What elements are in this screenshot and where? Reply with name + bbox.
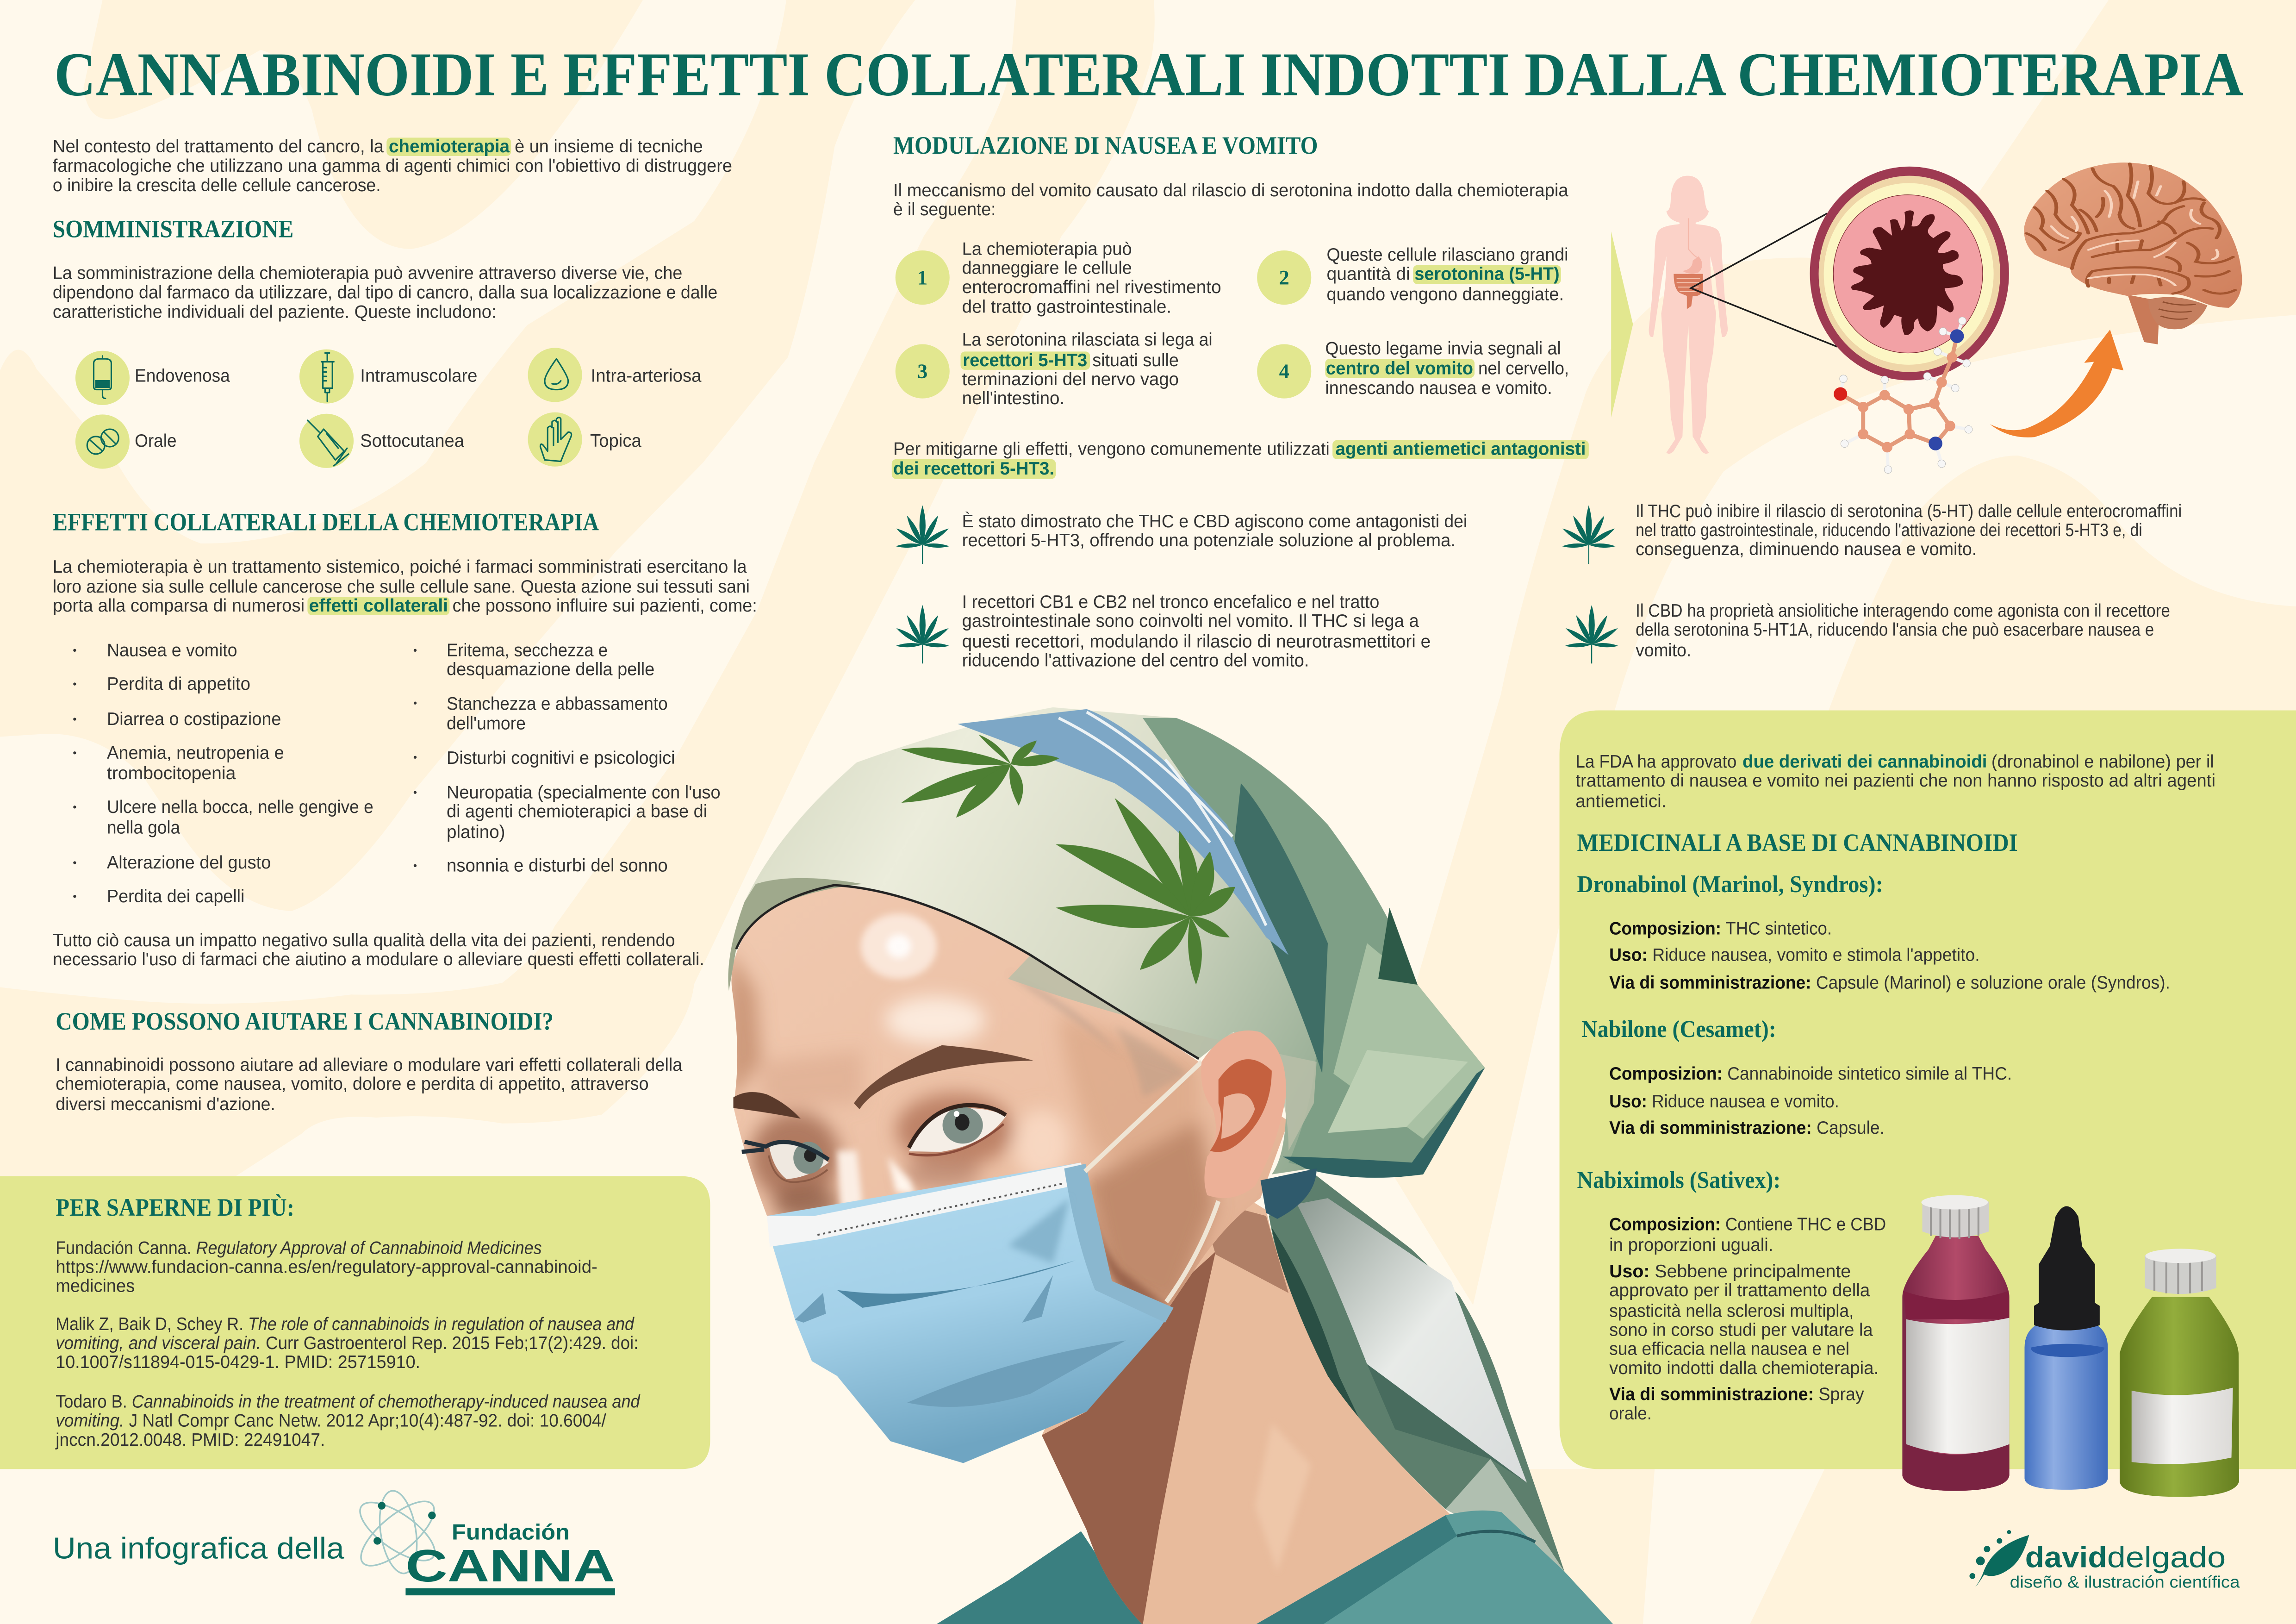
icon: cannabis leaf [1562,506,1616,564]
red bottle [1902,1195,2010,1491]
list: side effects column 1: Anemia, neutropenia e [107,743,284,763]
text block: somministrazione: dipendono dal farmaco da utilizzare, dal tipo di cancro, dalla sua localizzazione e dalle [53,282,717,302]
label: sottocutanea: Sottocutanea [360,431,464,451]
text: CBD ansiolitiche [1636,601,2170,660]
text block: impact [53,931,704,969]
text block: effetti collaterali [53,557,757,616]
text: THC CBD antagonisti: È stato dimostrato che THC e CBD agiscono come antagonisti dei [962,512,1467,531]
text block: come possono aiutare: I cannabinoidi possono aiutare ad alleviare o modulare vari effetti collaterali della [56,1055,683,1075]
text: THC inibire: Il THC può inibire il rilascio di serotonina (5-HT) dalle cellule enterocromaffini [1636,501,2182,521]
text: CBD ansiolitiche: vomito. [1636,640,1691,660]
arrow: triangle [1611,231,1633,418]
face mask [767,1162,1174,1463]
right scrub [1255,1511,1614,1624]
scarf [728,707,1485,1178]
logo: fundación canna: CANNA [405,1540,615,1591]
text: THC inibire [1636,501,2182,559]
icon: cannabis leaf [1564,605,1619,663]
medicine: nabilone: Via di somministrazione: Capsule. [1609,1118,1885,1138]
text: recettori CB1 CB2: questi recettori, modulando il rilascio di neurotrasmettitori e [962,631,1431,651]
text block: intro: o inibire la crescita delle cellule cancerose. [53,175,381,195]
step 4: 4 [1279,360,1289,382]
step 3: situati sulle [1092,350,1179,370]
text block: effetti collaterali: effetti collaterali [309,596,448,616]
text block: come possono aiutare [56,1055,683,1114]
text block: antiemetici: agenti antiemetici antagonisti [1335,439,1586,459]
medicine: nabiximols: sua efficacia nella nausea e nel [1609,1339,1849,1359]
medicine: dronabinol [1577,871,2170,993]
label: orale: Orale [135,431,177,451]
heading: somministrazione: SOMMINISTRAZIONE [53,215,293,243]
medicine: nabiximols: Uso: Sebbene principalmente [1609,1262,1851,1281]
step 1 [896,239,1221,317]
medicine: nabiximols: Nabiximols (Sativex): [1577,1167,1780,1193]
medicine: nabiximols: sono in corso studi per valutare la [1609,1320,1873,1340]
text: FDA [1575,752,2215,811]
step 3: La serotonina rilasciata si lega ai [962,330,1213,350]
heading: modulazione: MODULAZIONE DI NAUSEA E VOMITO [893,131,1318,159]
scarf tail [1269,1171,1564,1572]
text block: somministrazione: caratteristiche individuali del paziente. Queste includono: [53,302,497,322]
medicine: nabilone [1581,1016,2012,1138]
step 4: centro del vomito [1326,358,1473,378]
logo: fundación canna [351,1488,615,1595]
icon: endovenosa [75,351,130,405]
icon: intramuscolare [299,350,354,404]
heading: references: PER SAPERNE DI PIÙ: [56,1193,294,1221]
text: FDA: La FDA ha approvato [1575,752,1736,772]
label: endovenosa: Endovenosa [135,366,230,386]
list: side effects column 1: nella gola [107,818,180,837]
step 4 [1257,339,1569,399]
step 2: 2 [1279,266,1289,289]
step 3: terminazioni del nervo vago [962,369,1179,389]
step 1: danneggiare le cellule [962,258,1132,278]
panel: per saperne di più [0,1176,710,1469]
logo: david delgado: delgado [2107,1541,2226,1574]
medicine: nabiximols: Composizion: Contiene THC e CBD [1609,1215,1886,1235]
list: side effects column 2: desquamazione della pelle [447,660,654,680]
scarf leaves [901,735,1235,985]
heading: effetti collaterali: EFFETTI COLLATERALI DELLA CHEMIOTERAPIA [53,508,599,536]
step 2: Queste cellule rilasciano grandi [1326,245,1568,265]
list: side effects column 1: Alterazione del gusto [107,853,271,873]
medicine: dronabinol: Dronabinol (Marinol, Syndros): [1577,871,1883,898]
medicine: dronabinol: Via di somministrazione: Capsule (Marinol) e soluzione orale (Syndros). [1609,973,2170,993]
text: THC CBD antagonisti: recettori 5-HT3, offrendo una potenziale soluzione al problema. [962,531,1456,550]
list: side effects column 2: nsonnia e disturbi del sonno [447,856,668,876]
medicine: nabiximols: Via di somministrazione: Spray [1609,1385,1864,1405]
logo: david delgado: david [2025,1541,2107,1574]
text block: effetti collaterali: La chemioterapia è un trattamento sistemico, poiché i farmaci somministrati esercitano la [53,557,747,577]
panel: FDA and medicines [1560,711,2296,1469]
illustration: woman with mask [728,707,1614,1624]
text: recettori CB1 CB2: riducendo l'attivazione del centro del vomito. [962,651,1309,671]
step 1: 1 [917,266,927,289]
text: THC inibire: nel tratto gastrointestinale, riducendo l'attivazione dei recettori 5-HT3 e, di [1636,520,2142,540]
references list: Malik Z, Baik D, Schey R. The role of cannabinoids in regulation of nausea and [56,1314,635,1334]
step 2 [1257,245,1568,305]
list: side effects column 2: dell'umore [447,714,526,734]
text: THC CBD antagonisti [962,512,1467,550]
list: side effects column 1: Perdita dei capelli [107,887,244,906]
eyes and brows [734,1045,1033,1182]
logo: david delgado [1969,1530,2240,1592]
references list: Todaro B. Cannabinoids in the treatment of chemotherapy-induced nausea and [56,1392,641,1412]
icon: cannabis leaf [895,605,950,663]
list: side effects column 2: platino) [447,822,505,842]
list: side effects column 1: Perdita di appetito [107,674,250,694]
text block: effetti collaterali: loro azione sia sulle cellule cancerose che sulle cellule sane. Questa azione sui tessuti sani [53,577,750,597]
text: recettori CB1 CB2: gastrointestinale sono coinvolti nel vomito. Il THC si lega a [962,611,1419,631]
medicine: nabiximols: approvato per il trattamento della [1609,1280,1870,1300]
text block: intro [53,137,732,195]
scarf knot [1261,1168,1317,1219]
list: side effects column 2: Neuropatia (specialmente con l'uso [447,782,721,802]
list: side effects column 1: trombocitopenia [107,763,236,783]
references list [55,1238,641,1450]
medicine: nabiximols: vomito indotti dalla chemioterapia. [1609,1358,1879,1378]
step 1: del tratto gastrointestinale. [962,297,1171,317]
ear loops [1085,1062,1219,1302]
logo: fundación canna: Fundación [452,1520,570,1544]
text block: intro: è un insieme di tecniche [515,137,703,156]
text block: meccanismo: è il seguente: [893,200,996,219]
text: recettori CB1 CB2: I recettori CB1 e CB2 nel tronco encefalico e nel tratto [962,592,1379,612]
label: topica: Topica [590,431,641,451]
list: side effects column 1: Ulcere nella bocca, nelle gengive e [107,797,373,817]
text block: come possono aiutare: diversi meccanismi d'azione. [56,1094,275,1114]
step 3: 3 [917,360,927,382]
text block: intro: Nel contesto del trattamento del cancro, la [53,137,384,156]
medicine: dronabinol: Uso: Riduce nausea, vomito e stimola l'appetito. [1609,945,1980,965]
list: side effects column 2: Eritema, secchezza e [447,640,608,660]
references list: 10.1007/s11894-015-0429-1. PMID: 25715910. [56,1352,420,1372]
step 2: quantità di [1326,264,1410,284]
illustration: bottles [1902,1195,2239,1497]
face [731,887,1286,1306]
text: FDA: due derivati dei cannabinoidi [1742,752,1987,772]
ear [1201,1031,1286,1198]
illustration: intestine cross section [1810,167,2009,381]
references list: vomiting, and visceral pain. Curr Gastroenterol Rep. 2015 Feb;17(2):429. doi: [56,1333,638,1353]
label: intra-arteriosa: Intra-arteriosa [591,366,702,386]
neck [1042,1168,1451,1624]
references list: vomiting. J Natl Compr Canc Netw. 2012 Apr;10(4):487-92. doi: 10.6004/ [56,1411,606,1431]
step 2: serotonina (5-HT) [1414,264,1560,284]
text block: meccanismo: Il meccanismo del vomito causato dal rilascio di serotonina indotto dalla chemioterapia [893,181,1568,200]
list: side effects column 1 [73,640,373,906]
text block: intro: farmacologiche che utilizzano una gamma di agenti chimici con l'obiettivo di distruggere [53,156,732,176]
icon: topica [528,412,582,467]
icon: cannabis leaf [895,506,950,564]
text: FDA: trattamento di nausea e vomito nei pazienti che non hanno risposto ad altri agenti [1575,771,2215,791]
list: side effects column 2: Disturbi cognitivi e psicologici [447,748,675,768]
step 2: quando vengono danneggiate. [1326,285,1564,305]
text: FDA: (dronabinol e nabilone) per il [1991,752,2214,772]
icon: sottocutanea [299,414,354,468]
text block: antiemetici: Per mitigarne gli effetti, vengono comunemente utilizzati [893,439,1330,459]
list: side effects column 2 [414,640,721,876]
text block: effetti collaterali: che possono influire sui pazienti, come: [453,596,757,616]
arrow: orange [1990,330,2123,437]
references list: https://www.fundacion-canna.es/en/regulatory-approval-cannabinoid- [56,1257,597,1277]
icon: intra-arteriosa [528,348,582,402]
medicine: nabiximols: spasticità nella sclerosi multipla, [1609,1301,1854,1321]
icon: orale [75,414,130,468]
text: CBD ansiolitiche: della serotonina 5-HT1A, riducendo l'ansia che può esacerbare nausea e [1636,620,2154,640]
medicine: dronabinol: Composizion: THC sintetico. [1609,919,1832,939]
step 3: recettori 5-HT3 [963,350,1087,370]
logo: david delgado: diseño & ilustración científica [2010,1573,2240,1592]
step 4: innescando nausea e vomito. [1325,378,1552,398]
icons: administration routes [75,348,702,468]
text block: antiemetici [892,439,1589,479]
footer text: una infografica: Una infografica della [53,1531,344,1565]
text block: meccanismo [893,181,1568,219]
blue bottle [2024,1206,2108,1490]
step 1: enterocromaffini nel rivestimento [962,277,1221,297]
step 1: La chemioterapia può [962,239,1132,259]
text: THC inibire: conseguenza, diminuendo nausea e vomito. [1636,539,1977,559]
text block: impact: necessario l'uso di farmaci che aiutino a modulare o alleviare questi effetti collaterali. [53,949,704,969]
step 3 [896,330,1213,408]
medicine: nabiximols [1577,1167,1886,1424]
illustration: serotonin molecule [1834,317,1972,474]
text block: antiemetici: dei recettori 5-HT3. [893,459,1054,479]
references list: Fundación Canna. Regulatory Approval of Cannabinoid Medicines [56,1238,542,1258]
medicine: nabilone: Uso: Riduce nausea e vomito. [1609,1092,1839,1112]
text block: effetti collaterali: porta alla comparsa di numerosi [53,596,305,616]
text block: somministrazione [53,263,717,322]
list: side effects column 1: Diarrea o costipazione [107,709,281,729]
heading: come possono aiutare: COME POSSONO AIUTARE I CANNABINOIDI? [56,1007,554,1035]
label: intramuscolare: Intramuscolare [360,366,477,386]
text: recettori CB1 CB2 [962,592,1431,671]
text block: somministrazione: La somministrazione della chemioterapia può avvenire attraverso diverse vie, che [53,263,682,283]
medicine: nabilone: Composizion: Cannabinoide sintetico simile al THC. [1609,1064,2012,1084]
step 4: Questo legame invia segnali al [1325,339,1561,359]
text block: intro: chemioterapia [389,137,510,156]
illustration: body silhouette [1649,176,1728,454]
medicine: nabilone: Nabilone (Cesamet): [1581,1016,1776,1043]
heading: medicinali: MEDICINALI A BASE DI CANNABINOIDI [1577,829,2018,856]
step 3: nell'intestino. [962,388,1064,408]
text block: come possono aiutare: chemioterapia, come nausea, vomito, dolore e perdita di appetito, attraverso [56,1074,649,1094]
green bottle [2120,1249,2239,1497]
list: side effects column 1: Nausea e vomito [107,640,237,660]
list: side effects column 2: di agenti chemioterapici a base di [447,801,707,821]
illustration: brain [2024,162,2242,344]
text: CBD ansiolitiche: Il CBD ha proprietà ansiolitiche interagendo come agonista con il recettore [1636,601,2170,621]
medicine: nabiximols: in proporzioni uguali. [1609,1235,1773,1255]
list: side effects column 2: Stanchezza e abbassamento [447,694,668,714]
left scrub [935,1531,1143,1624]
references list: jnccn.2012.0048. PMID: 22491047. [55,1430,325,1450]
illustration: zoom lines [1691,213,1837,347]
text: FDA: antiemetici. [1575,791,1667,811]
step 4: nel cervello, [1478,358,1569,378]
text block: impact: Tutto ciò causa un impatto negativo sulla qualità della vita dei pazienti, rendendo [53,931,675,950]
medicine: nabiximols: orale. [1609,1404,1652,1424]
references list: medicines [56,1276,135,1296]
